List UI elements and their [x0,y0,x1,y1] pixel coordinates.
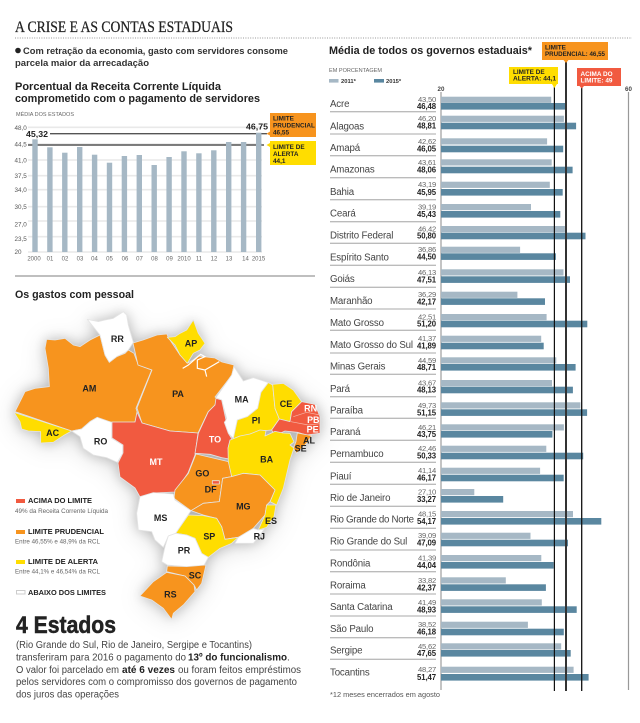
row: Tocantins: 51,47 [417,673,436,682]
state: SC [167,565,206,590]
row: Paraíba [330,401,587,418]
legend: map [15,496,109,597]
row: Pernambuco: 50,33 [417,452,437,461]
callout: limite prudencial 46,55 [542,42,608,63]
row: Ceará: 45,43 [417,210,437,219]
row: Mato Grosso do Sul: 41,37 [418,334,436,343]
row: Amazonas [330,158,573,178]
row: Distrito Federal: Distrito Federal [330,230,393,241]
callout: limite de alerta: ALERTA [273,151,299,158]
bar chart: evolução 2000-2015: 09 [166,256,173,262]
row: Goiás: 46,13 [418,268,436,277]
row: Santa Catarina: 48,93 [417,605,437,614]
state: CE [273,383,302,422]
row: Mato Grosso: 51,20 [417,320,437,329]
row: Amazonas: 48,06 [417,166,437,175]
state: DF [205,481,219,494]
state: PR [162,533,208,567]
row: Amapá: Amapá [330,143,361,154]
row: Ceará: Ceará [330,209,356,220]
row: Espírito Santo: 44,50 [417,252,437,261]
row: Bahia: 45,95 [417,188,437,197]
row: Rio Grande do Sul [330,531,568,550]
row: Piauí [330,466,564,484]
bar chart: evolução 2000-2015: 12 [211,256,218,262]
states: AL, SE: AL [303,435,315,445]
legend item: limite prudencial: LIMITE PRUDENCIAL [28,527,104,536]
row: Roraima: 33,82 [418,576,436,585]
row: Santa Catarina: Santa Catarina [330,602,393,613]
row: Mato Grosso: Mato Grosso [330,318,384,329]
callout: limite prudencial 46,55: LIMITE [545,44,567,51]
row: Ceará [330,202,560,222]
row: Alagoas [330,114,576,134]
state: MA: MA [235,394,249,404]
bar chart: evolução 2000-2015: 13 [226,256,233,262]
bar chart: evolução 2000-2015: 2000 [27,256,41,262]
callout: limite de alerta: 44,1 [273,158,286,165]
bar chart: evolução 2000-2015: 06 [122,256,129,262]
state: AC: AC [46,428,60,438]
row: Paraná: 43,75 [417,430,437,439]
horizontal bar chart by state: 60 [625,86,632,93]
row: Pernambuco: 42,46 [418,444,436,453]
row: Sergipe [330,642,571,659]
callout: limite de alerta 44,1: LIMITE DE [513,69,545,76]
state: AP [167,320,205,363]
body text: . [287,652,290,664]
title: A CRISE E AS CONTAS ESTADUAIS [15,19,233,36]
legend item: acima do limite [15,496,109,515]
state: MG [191,473,275,539]
legend item: limite prudencial [15,527,104,546]
state: ES: ES [265,516,277,526]
body text: transferiram para 2016 o pagamento do [16,652,186,664]
states: RN, PB, PE [272,402,320,436]
states: RN, PB, PE: PB [307,415,320,425]
bar chart: evolução 2000-2015: 44,5 [14,142,27,148]
legend: 2011 and 2015 [329,79,402,85]
state: RS: RS [164,590,177,600]
state: MA [216,367,268,438]
state: AP: AP [185,339,197,349]
bar chart: evolução 2000-2015: 27,0 [14,222,27,228]
state: RJ: RJ [254,532,265,542]
row: Distrito Federal [330,224,586,243]
row: Piauí: 41,14 [418,466,436,475]
bar chart: evolução 2000-2015: 30,5 [14,204,27,211]
footnote: *12 meses encerrados em agosto [330,692,440,699]
states: AL, SE: SE [295,443,307,453]
row: Bahia [330,180,563,200]
row: Roraima [330,576,546,594]
row: Alagoas: Alagoas [330,121,364,132]
row: Maranhão: 42,17 [417,297,436,306]
state: GO: GO [195,469,209,479]
state: PA: PA [172,389,184,399]
bar chart: evolução 2000-2015: 46,75 [246,122,269,132]
callout: limite prudencial [266,113,316,137]
state: BA: BA [260,454,274,464]
body text [16,640,301,700]
row: Amapá: 46,05 [417,145,437,154]
chart note: média dos estados: MÉDIA DOS ESTADOS [16,111,74,118]
row: Acre: Acre [330,99,349,110]
row: Roraima: 42,37 [417,583,436,592]
state: MG: MG [236,502,251,512]
row: Amapá: 42,62 [418,137,436,146]
heading: os gastos com pessoal: Os gastos com pessoal [15,289,134,301]
state: MT: MT [150,457,163,467]
body text: 13º do funcionalismo [188,652,287,664]
row: Paraíba: 51,15 [417,408,437,417]
state: RO [72,417,123,462]
bar chart: evolução 2000-2015: 05 [106,256,113,262]
state: PI: PI [252,416,260,426]
row: Mato Grosso [330,312,587,330]
bar chart: evolução 2000-2015: 48,0 [14,125,27,132]
callout: limite de alerta: LIMITE DE [273,144,305,151]
body text: dos juros das operações [16,690,119,700]
row: Tocantins: 48,27 [418,665,436,674]
bar chart: evolução 2000-2015: 20 [14,249,22,256]
row: Alagoas: 48,81 [417,122,437,131]
states: AL, SE [293,433,315,453]
state: AM: AM [82,383,96,393]
row: Mato Grosso: 42,51 [418,312,436,322]
callout: acima do limite 49: ACIMA DO [580,71,613,78]
bar chart: evolução 2000-2015: 23,5 [14,236,27,243]
callout: limite prudencial: 46,55 [273,130,289,136]
row: Espírito Santo: 36,86 [418,245,436,254]
row: Rio de Janeiro: 27,10 [418,488,436,496]
row: Amazonas: Amazonas [330,165,375,176]
state: RS [140,572,195,619]
row: Rio Grande do Norte: 48,15 [418,510,436,518]
row: Goiás: 47,51 [417,275,437,284]
callout: limite de alerta [266,141,316,165]
horizontal bar chart by state: 20 [438,86,445,93]
callout: limite prudencial: LIMITE [273,116,295,122]
bar chart: evolução 2000-2015: 03 [77,256,84,262]
row: Maranhão [330,290,545,309]
row: Distrito Federal: 50,80 [417,232,437,241]
row: Paraná: 46,21 [418,423,436,432]
state: BA [228,430,294,505]
state: AC [14,412,72,443]
row: Pará: Pará [330,384,351,395]
map of Brazil [14,312,320,619]
bar chart: evolução 2000-2015 [14,122,269,262]
bar chart: evolução 2000-2015: 01 [47,256,54,262]
row: Sergipe: Sergipe [330,646,362,657]
row: Roraima: Roraima [330,580,366,591]
body text: até 6 vezes [122,665,175,676]
callout: limite de alerta 44,1 [509,67,558,88]
states: RN, PB, PE: PE [307,424,319,434]
row: Amazonas: 43,61 [418,158,436,167]
legend item: limite de alerta [15,557,101,576]
bar chart: evolução 2000-2015: 41,0 [14,158,27,164]
legend item: limite de alerta: Entre 44,1% e 46,54% da RCL [15,568,101,576]
bar chart: evolução 2000-2015: 04 [91,256,98,262]
big number: 4 Estados: 4 Estados [16,612,116,639]
state: PA [133,334,234,433]
row: Rio Grande do Sul: 47,09 [417,539,437,548]
row: Sergipe: 47,65 [417,649,437,658]
row: Sergipe: 45,62 [418,642,436,651]
row: Acre: 43,50 [418,95,436,104]
row: Maranhão: Maranhão [330,296,372,307]
state: PR: PR [178,545,191,555]
bar chart: evolução 2000-2015: 45,32 [26,130,49,139]
row: Paraíba: Paraíba [330,405,364,416]
row: Piauí: 46,17 [417,474,436,483]
legend item: acima do limite: 49% da Receita Corrente Líquida [15,508,109,515]
state: RJ [235,528,265,543]
row: Acre [330,95,565,112]
horizontal bar chart by state [330,86,632,690]
row: Alagoas: 46,20 [418,114,436,123]
state: RO: RO [94,437,107,447]
state: RR [87,312,133,362]
row: Mato Grosso do Sul [330,334,544,353]
row: Minas Gerais: 48,71 [417,363,437,372]
bar chart: evolução 2000-2015: 34,0 [14,187,27,194]
row: Pará [330,378,573,397]
row: Acre: 46,48 [417,102,437,111]
body text: O valor foi parcelado em [16,665,119,676]
row: Rio de Janeiro [330,488,503,506]
row: Distrito Federal: 46,42 [418,224,436,234]
row: Minas Gerais [330,356,576,374]
row: São Paulo [330,620,564,638]
row: Rio Grande do Sul: 39,09 [418,531,436,540]
states: RN, PB, PE: RN [304,404,317,414]
state: CE: CE [280,399,292,409]
callout: limite de alerta 44,1: ALERTA: 44,1 [513,76,556,82]
legend: 2011 and 2015: 2011* [341,79,357,85]
bar chart: evolução 2000-2015: 2015 [252,256,266,262]
state: TO: TO [209,434,221,444]
row: São Paulo: São Paulo [330,624,373,635]
row: Bahia: 43,19 [418,180,436,189]
state: PI [233,383,279,443]
heading: porcentual da receita: comprometido com o pagamento de servidores [15,93,260,105]
row: Rio Grande do Norte: 54,17 [417,517,436,526]
row: Rio de Janeiro: 33,27 [417,495,436,504]
row: Pernambuco: Pernambuco [330,449,383,460]
bar chart: evolução 2000-2015: 37,5 [14,173,27,180]
row: Amapá [330,137,563,156]
row: Santa Catarina [330,598,577,616]
callout: limite prudencial 46,55: PRUDENCIAL: 46,55 [545,51,605,58]
subheading text block: Com retração da economia, gasto com servidores consome [23,45,288,56]
row: Goiás: Goiás [330,274,355,285]
state: SP [176,515,238,557]
state: SC: SC [189,570,202,580]
bar chart: evolução 2000-2015: 07 [136,256,143,262]
row: Pernambuco [330,444,583,462]
row: Ceará: 39,19 [418,202,436,212]
row: Tocantins [330,665,589,682]
row: Espírito Santo: Espírito Santo [330,252,389,263]
state: MT [112,412,198,497]
bar chart: evolução 2000-2015: 2010 [177,256,191,262]
callout: acima do limite 49 [577,68,621,88]
row: Pará: 43,67 [418,378,436,388]
row: Rio Grande do Sul: Rio Grande do Sul [330,537,407,548]
row: Goiás [330,268,570,287]
row: Rondônia [330,554,554,572]
row: Rondônia: 44,04 [417,561,437,570]
row: Mato Grosso do Sul: Mato Grosso do Sul [330,340,413,351]
row: Santa Catarina: 41,49 [418,598,436,607]
row: Maranhão: 36,29 [418,290,436,299]
row: Rio Grande do Norte: Rio Grande do Norte [330,515,414,526]
reference line: limite de alerta 44,1 [553,86,555,691]
row: Piauí: Piauí [330,471,352,482]
row: Rondônia: 41,39 [418,554,436,562]
state: MS: MS [154,513,167,523]
bar chart: evolução 2000-2015: 02 [62,256,69,262]
row: Paraná [330,423,564,440]
heading: porcentual da receita: Porcentual da Receita Corrente Líquida [15,81,222,93]
bar chart: evolução 2000-2015: 14 [242,256,249,262]
body text: (Rio Grande do Sul, Rio de Janeiro, Sergipe e Tocantins) [16,640,252,651]
legend item: limite de alerta: LIMITE DE ALERTA [28,557,99,566]
row: Rondônia: Rondônia [330,558,371,569]
bar chart: evolução 2000-2015: 08 [151,256,158,262]
row: Pará: 48,13 [417,386,437,395]
row: Rio Grande do Norte [330,510,601,528]
legend: 2011 and 2015: 2015* [386,79,402,85]
body text: pelos servidores com o compromisso dos governos de pagamento [16,677,297,688]
legend item: acima do limite: ACIMA DO LIMITE [28,496,92,505]
row: Mato Grosso do Sul: 41,89 [417,342,437,351]
legend item: limite prudencial: Entre 46,55% e 48,9% da RCL [15,538,101,546]
state: AM [15,335,152,431]
bar chart: evolução 2000-2015: 11 [196,256,203,262]
row: Minas Gerais: 44,59 [418,356,436,365]
row: Paraná: Paraná [330,427,361,438]
row: São Paulo: 46,18 [417,628,437,637]
subheading text block [15,45,288,68]
legend item: abaixo dos limites: ABAIXO DOS LIMITES [28,588,106,597]
state: GO [174,454,232,511]
row: Bahia: Bahia [330,187,355,198]
state: ES [258,505,277,530]
state: SP: SP [203,532,215,542]
reference line: acima do limite 49 [581,86,583,691]
subheading text block: parcela maior da arrecadação [15,57,149,68]
row: Paraíba: 49,73 [418,401,436,410]
row: Minas Gerais: Minas Gerais [330,362,386,373]
row: Tocantins: Tocantins [330,668,370,679]
row: São Paulo: 38,52 [418,620,436,629]
state: TO [195,398,233,459]
callout: acima do limite 49: LIMITE: 49 [580,78,613,84]
heading: porcentual da receita [15,81,260,105]
state: MS [137,493,191,547]
reference line: limite prudencial 46,55 [565,61,567,691]
state: DF: DF [205,484,217,494]
chart note: em porcentagem: EM PORCENTAGEM [329,68,382,74]
body text: ou foram feitos empréstimos [178,665,301,676]
row: Espírito Santo [330,245,556,265]
row: Rio de Janeiro: Rio de Janeiro [330,493,390,504]
state: RR: RR [111,334,124,344]
callout: limite prudencial: PRUDENCIAL [273,122,315,130]
heading: média de todos os governos estaduais: Média de todos os governos estaduais* [329,45,533,57]
